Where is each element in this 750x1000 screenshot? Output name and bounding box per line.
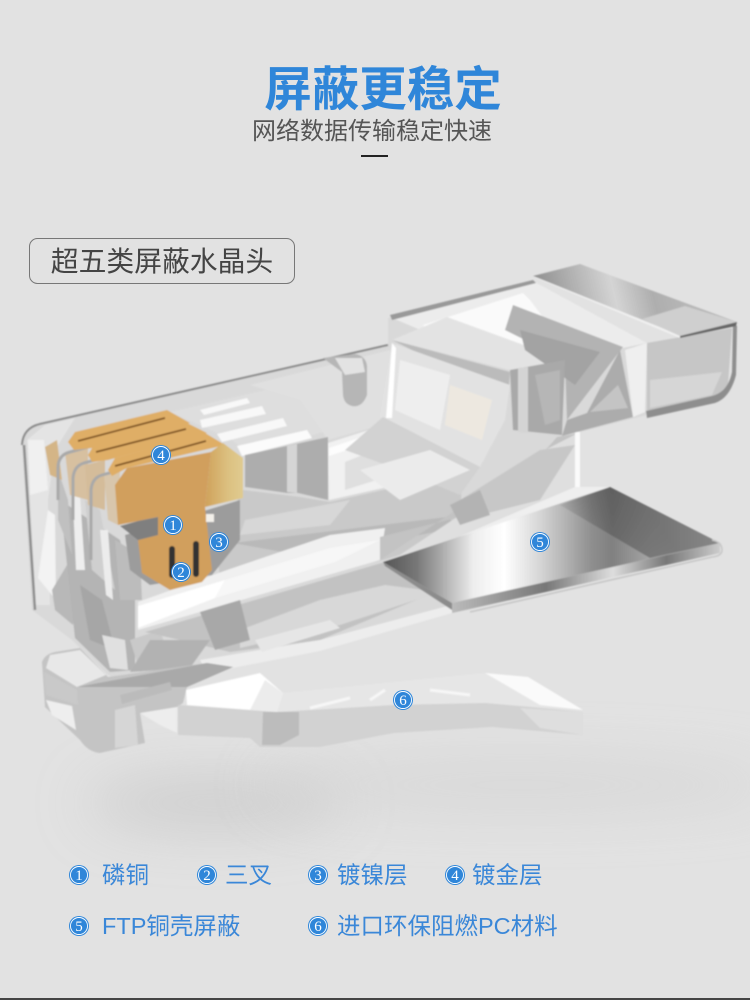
legend item 2: 三叉 (225, 862, 272, 888)
marker 6: 6 (399, 693, 407, 709)
marker 2: 2 (177, 565, 185, 581)
icon: metal latch clip (323, 354, 367, 406)
white strip (138, 528, 385, 630)
top stripes (170, 382, 345, 455)
legend item 5: FTP铜壳屏蔽 (102, 913, 240, 939)
callout markers on connector (151, 445, 550, 710)
product label: 超五类屏蔽水晶头 (51, 246, 273, 277)
marker 6 (393, 690, 413, 710)
connector illustration (22, 264, 737, 753)
legend item 1 (69, 862, 149, 888)
panel: latch tang (42, 648, 583, 753)
marker 2 (171, 562, 191, 582)
bar face (510, 360, 565, 435)
dark block (245, 437, 328, 500)
legend item 3: 3 (314, 868, 322, 884)
legend item 1: 1 (75, 868, 83, 884)
marker 5: 5 (536, 535, 544, 551)
panel: gold contacts (45, 410, 243, 590)
marker 1 (163, 515, 183, 535)
legend item 2 (197, 862, 272, 888)
panel: copper shield plate (383, 487, 722, 613)
legend item 3: 镀镍层 (337, 862, 408, 888)
marker 1: 1 (169, 518, 177, 534)
legend (69, 862, 558, 939)
panel: main clear body (22, 281, 647, 683)
legend item 6: 进口环保阻燃PC材料 (337, 913, 558, 939)
legend item 4: 4 (451, 868, 459, 884)
marker 3: 3 (215, 535, 223, 551)
title dash (361, 155, 388, 157)
right box (647, 328, 732, 413)
legend item 5: 5 (75, 919, 83, 935)
product label (30, 238, 294, 284)
marker 4: 4 (157, 448, 165, 464)
panel: metal roof (533, 264, 737, 338)
marker 3 (209, 532, 229, 552)
title: 屏蔽更稳定 (264, 64, 502, 117)
legend item 4: 镀金层 (472, 862, 542, 888)
left face facets (27, 418, 75, 605)
panel: curved rear underside (380, 432, 610, 562)
lower grey band (215, 470, 462, 592)
rear window (380, 343, 510, 467)
legend item 1: 磷铜 (102, 862, 149, 888)
panel: rear housing (345, 280, 737, 500)
bright area right of block (328, 420, 413, 500)
subtitle: 网络数据传输稳定快速 (252, 118, 492, 145)
marker 5 (530, 532, 550, 552)
below strip (145, 562, 440, 652)
legend item 2: 2 (203, 868, 211, 884)
wedge (505, 305, 623, 420)
marker 4 (151, 445, 171, 465)
legend item 6: 6 (314, 919, 322, 935)
